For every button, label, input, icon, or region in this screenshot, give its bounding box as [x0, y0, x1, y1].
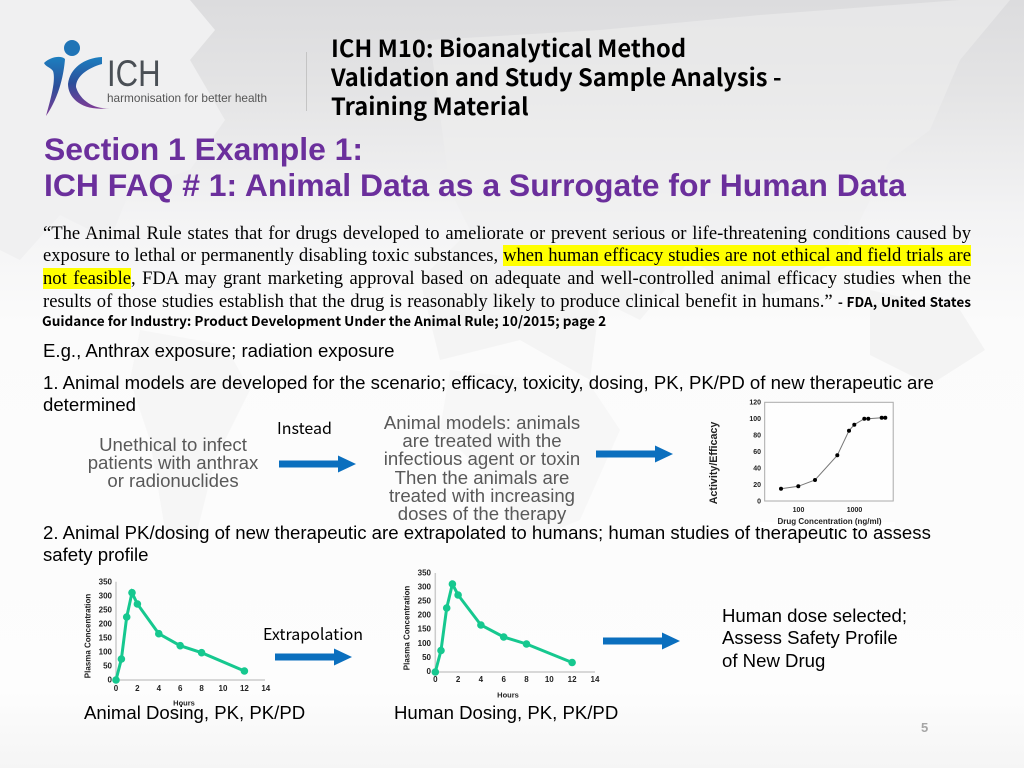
example text: E.g., Anthrax exposure; radiation exposure: [43, 340, 394, 361]
chart: human dosing: 200: [418, 610, 432, 620]
header title: ICH M10: Bioanalytical Method: [331, 30, 686, 64]
chart: human dosing: 10: [545, 675, 554, 684]
chart: animal dosing: 14: [261, 684, 271, 693]
point 2 text: 2. Animal PK/dosing of new therapeutic are extrapolated to humans; human studies of therapeutic to assess safety profile: [43, 522, 931, 565]
animal models text: [384, 412, 580, 524]
chart: animal dosing: [84, 578, 271, 708]
chart: animal dosing: 50: [103, 662, 113, 670]
chart: human dosing: 12: [568, 675, 577, 684]
chart: human dosing: 0: [433, 675, 438, 684]
logo: ICH: [44, 40, 267, 116]
unethical text: [88, 434, 258, 491]
chart: animal dosing: 8: [199, 684, 204, 693]
page number: 5: [921, 720, 928, 735]
chart: animal dosing: Plasma Concentration: [84, 594, 92, 678]
chart: activity/efficacy: 0: [757, 498, 761, 506]
chart: human dosing: 0: [427, 667, 432, 676]
chart: human dosing: Plasma Concentration: [402, 586, 412, 670]
chart: human dosing: 350: [418, 568, 432, 578]
chart: animal dosing: 2: [135, 684, 140, 693]
animal models text: Animal models: animals are treated with the infectious agent or toxin: [384, 412, 580, 469]
extrapolation label: Extrapolation: [263, 621, 363, 645]
human dose text: of New Drug: [722, 650, 825, 671]
chart: human dosing: 150: [418, 624, 432, 634]
instead label: Instead: [277, 415, 332, 439]
chart: human dosing: [402, 568, 600, 700]
chart: human dosing: 50: [422, 653, 432, 662]
chart: human dosing: 100: [418, 639, 432, 648]
chart: activity/efficacy: 60: [753, 449, 761, 456]
human dose text: Assess Safety Profile: [722, 627, 898, 648]
chart: activity/efficacy: Drug Concentration (ng/ml): [778, 517, 882, 526]
unethical text: Unethical to infect: [99, 434, 247, 455]
header divider: [306, 52, 307, 111]
section heading: ICH FAQ # 1: Animal Data as a Surrogate for Human Data: [44, 167, 906, 203]
chart: human dosing: 2: [456, 675, 461, 684]
chart: animal dosing: 300: [99, 592, 113, 600]
chart: human dosing: 300: [418, 582, 432, 592]
human dosing caption: Human Dosing, PK, PK/PD: [394, 702, 618, 723]
animal dosing caption: Animal Dosing, PK, PK/PD: [84, 702, 305, 723]
human dose text: Human dose selected;: [722, 605, 907, 626]
animal models text: Then the animals are treated with increasing doses of the therapy: [389, 467, 575, 524]
chart: human dosing: 8: [524, 675, 529, 684]
chart: animal dosing: 200: [99, 620, 113, 628]
chart: activity/efficacy: 80: [753, 432, 761, 440]
chart: animal dosing: 12: [240, 684, 249, 693]
section heading: [44, 131, 906, 203]
chart: human dosing: 14: [591, 675, 600, 684]
chart: animal dosing: 10: [219, 684, 228, 693]
quotation source: Guidance for Industry: Product Development Under the Animal Rule; 10/2015; page 2: [42, 310, 606, 330]
unethical text: patients with anthrax: [88, 452, 258, 473]
chart: activity/efficacy: 1000: [847, 507, 862, 514]
header title: Training Material: [331, 88, 529, 122]
chart: activity/efficacy: [708, 400, 894, 528]
arrow 1: [279, 456, 356, 472]
chart: animal dosing: 0: [114, 684, 119, 693]
chart: human dosing: 250: [418, 596, 432, 606]
chart: activity/efficacy: 120: [749, 400, 761, 406]
chart: activity/efficacy: 20: [753, 482, 761, 489]
chart: activity/efficacy: 100: [793, 507, 804, 514]
chart: animal dosing: Hours: [173, 698, 195, 708]
chart: activity/efficacy: Activity/Efficacy: [708, 422, 720, 504]
human dose text: [722, 605, 907, 671]
arrow 2: [596, 446, 673, 462]
chart: activity/efficacy: 40: [753, 466, 761, 472]
unethical text: or radionuclides: [107, 470, 239, 491]
quotation paragraph: “The Animal Rule states that for drugs developed to ameliorate or prevent serious or life-threatening conditions caused by exposure to lethal or permanently disabling toxic substances, when human efficacy studies are not ethical and field trials are not feasible, FDA may grant marketing approval based on adequate and well-controlled animal efficacy studies when the results of those studies establish that the drug is reasonably likely to produce clinical benefit in humans.” - FDA, United States: [43, 223, 971, 312]
chart: animal dosing: 6: [178, 684, 183, 693]
header title: Validation and Study Sample Analysis -: [331, 59, 782, 93]
chart: human dosing: 6: [501, 675, 506, 684]
chart: animal dosing: 100: [99, 648, 113, 656]
point 1 text: 1. Animal models are developed for the scenario; efficacy, toxicity, dosing, PK, PK/PD of new therapeutic are determined: [43, 372, 934, 415]
arrow 3: [275, 648, 352, 666]
chart: animal dosing: 0: [108, 676, 113, 684]
chart: activity/efficacy: 100: [749, 416, 761, 423]
logo: ICH: harmonisation for better health: [107, 91, 267, 105]
chart: animal dosing: 150: [99, 634, 113, 642]
arrow 4: [603, 632, 680, 650]
header title: [330, 30, 782, 122]
chart: animal dosing: 350: [99, 578, 113, 586]
chart: human dosing: Hours: [497, 690, 519, 700]
logo: ICH: ICH: [107, 53, 161, 94]
chart: human dosing: 4: [479, 675, 484, 684]
chart: animal dosing: 4: [157, 684, 162, 693]
section heading: Section 1 Example 1:: [44, 131, 363, 167]
chart: animal dosing: 250: [99, 606, 113, 614]
